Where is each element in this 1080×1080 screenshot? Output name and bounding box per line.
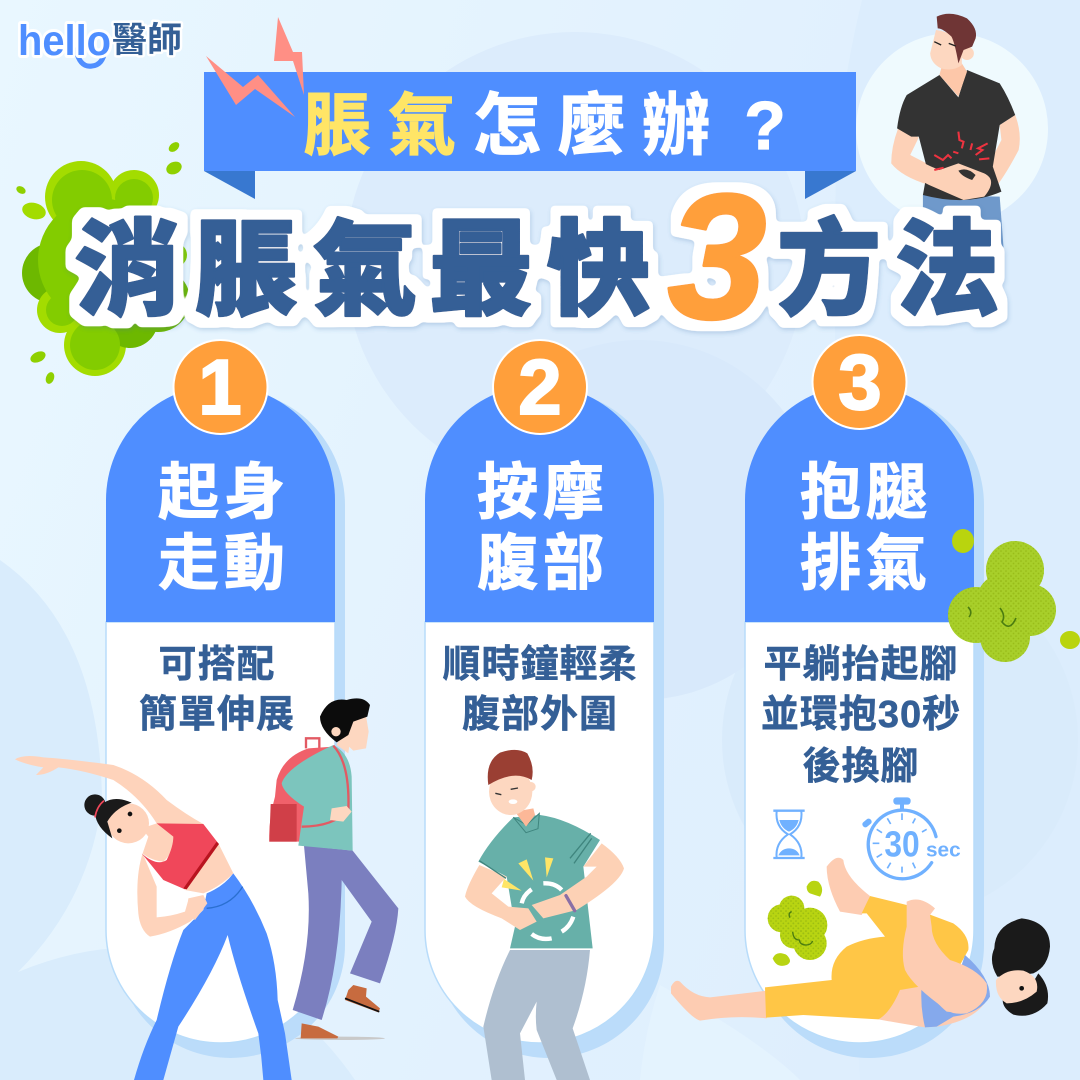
card blue header (425, 385, 654, 622)
body text: 平躺抬起腳 (763, 644, 959, 686)
sleeve lines (479, 833, 592, 878)
neck (515, 808, 535, 827)
logo stethoscope (76, 50, 105, 66)
ribbon fold right (805, 171, 856, 199)
panel 2: 按摩腹部 (425, 340, 664, 1058)
ear (960, 47, 974, 60)
sole (345, 998, 379, 1012)
trousers (293, 846, 398, 1020)
heading text line 2: 排氣 (800, 529, 932, 597)
hair (320, 698, 370, 742)
circular arrows (522, 883, 573, 939)
blue sports bra (921, 955, 990, 1027)
banner heading (303, 88, 786, 164)
left arm (891, 128, 995, 200)
body text: 順時鐘輕柔 (442, 644, 638, 686)
bent arm (137, 853, 203, 937)
title: 消脹氣最快3方法: 快 (547, 213, 651, 329)
blue leggings (134, 873, 292, 1080)
hair bottom (1003, 973, 1048, 1016)
face (489, 768, 532, 815)
illustration: leg hug pose with timer (671, 797, 1050, 1027)
hair tie (95, 801, 104, 817)
banner heading: 脹 (303, 88, 371, 164)
number badge 1: 1 (198, 343, 242, 431)
icon: stippled green gas cloud right (948, 529, 1080, 662)
card shadow (435, 390, 664, 1058)
heading text: 起身 (158, 458, 290, 526)
number badge 2 (493, 340, 587, 434)
title: 消脹氣最快3方法: 最 (429, 213, 533, 329)
logo chinese: 醫師 (112, 21, 182, 60)
banner heading: 怎 (473, 88, 541, 164)
face (930, 30, 962, 69)
torso (185, 843, 233, 893)
wristband (566, 896, 575, 911)
card shadow (755, 390, 984, 1058)
neck (939, 63, 967, 97)
icon: green gas cloud (15, 140, 190, 385)
title: 消脹氣最快3方法: 氣 (313, 213, 417, 329)
ear (331, 727, 341, 736)
illustration: man massaging belly (465, 750, 624, 1080)
icon: lightning bolts (206, 17, 304, 117)
icon: small gas cloud (768, 881, 827, 966)
neck (142, 823, 173, 862)
pain triangles (502, 857, 553, 891)
hair (488, 750, 533, 785)
strap (302, 746, 348, 827)
waistband line (207, 887, 243, 908)
back foot (345, 985, 380, 1012)
card blue header (106, 385, 335, 622)
bun (84, 794, 106, 816)
card white body (425, 622, 654, 1043)
icon: stopwatch: 30 (884, 823, 920, 864)
card blue header (745, 385, 974, 622)
jeans (923, 195, 1004, 257)
card shadow (116, 390, 345, 1058)
backpack handle (306, 738, 319, 748)
title: 消脹氣最快3方法: 法 (895, 213, 999, 329)
title: 消脹氣最快3方法: 方 (777, 213, 881, 329)
illustration: boy with backpack (269, 698, 398, 1040)
hair (95, 799, 132, 838)
heading text: 按摩 (477, 458, 609, 526)
hair (937, 14, 976, 63)
ear (526, 782, 536, 791)
pain marks (934, 132, 989, 170)
logo wordmark: hello (18, 17, 111, 65)
raised foot (827, 858, 870, 915)
backpack pocket (269, 804, 297, 842)
collar (513, 813, 539, 833)
body text line 3: 後換腳 (802, 746, 920, 788)
banner heading: 氣 (388, 88, 456, 164)
pale circle behind man (856, 33, 1048, 225)
straight leg (671, 981, 767, 1021)
mouth (509, 799, 517, 804)
right arm (532, 843, 624, 918)
number badge 1 (174, 340, 268, 434)
ribbon body (204, 72, 856, 171)
card white body (106, 622, 335, 1043)
teal shirt (478, 815, 600, 948)
title: 消脹氣最快3方法 (75, 157, 999, 356)
left arm (465, 865, 537, 930)
hand (330, 806, 352, 822)
eyes and brows (117, 812, 132, 833)
heading text line 2: 走動 (158, 529, 290, 597)
ribbon banner (204, 72, 856, 199)
eyes (1019, 986, 1024, 991)
lower forearm over shirt (898, 155, 991, 200)
eyes (934, 42, 956, 46)
illustration: woman side stretching (15, 756, 292, 1080)
face (996, 970, 1037, 1003)
banner heading: ? (744, 88, 786, 164)
illustration: man with stomach ache (856, 14, 1048, 257)
black cuff shadow (958, 169, 976, 180)
banner heading: 麼 (557, 88, 625, 164)
yellow shorts (765, 896, 968, 1019)
body text line 2: 並環抱30秒 (761, 694, 961, 736)
logo: hello 醫師 (18, 17, 182, 66)
title: 消脹氣最快3方法: 3 (668, 157, 766, 356)
top band (183, 842, 219, 889)
torso (878, 980, 990, 1027)
heading text line 2: 腹部 (477, 529, 609, 597)
body text line 2: 腹部外圍 (462, 694, 618, 736)
title: 消脹氣最快3方法: 消 (75, 213, 179, 329)
ribbon fold left (204, 171, 255, 199)
face features (495, 788, 518, 795)
card white body (745, 622, 974, 1043)
sweater (282, 745, 353, 851)
right arm (977, 115, 1020, 193)
hugging arm (903, 899, 987, 1014)
title: 消脹氣最快3方法: 脹 (194, 213, 298, 329)
front shoe (301, 1023, 338, 1038)
body text: 可搭配 (158, 644, 276, 686)
heading text: 抱腿 (800, 458, 932, 526)
hand on hip (187, 895, 207, 920)
red crop top (142, 823, 218, 889)
face (339, 710, 369, 751)
black polo shirt (897, 70, 1015, 200)
ground shadow (295, 1037, 385, 1040)
raised arm (15, 756, 203, 853)
panel 1: 起身走動 (106, 340, 345, 1058)
grey trousers (483, 950, 590, 1080)
icon: stopwatch (861, 797, 961, 879)
icon: stopwatch: sec (926, 839, 961, 862)
body text line 2: 簡單伸展 (139, 694, 295, 736)
neck (337, 737, 350, 753)
banner heading: 辦 (642, 88, 710, 164)
number badge 3: 3 (838, 338, 882, 426)
number badge 3 (812, 335, 906, 429)
number badge 2: 2 (518, 343, 562, 431)
face (108, 803, 149, 843)
icon: hourglass (773, 811, 805, 858)
backpack body (269, 747, 333, 842)
hair top (992, 918, 1050, 977)
panel 3: 抱腿排氣 (745, 335, 984, 1058)
